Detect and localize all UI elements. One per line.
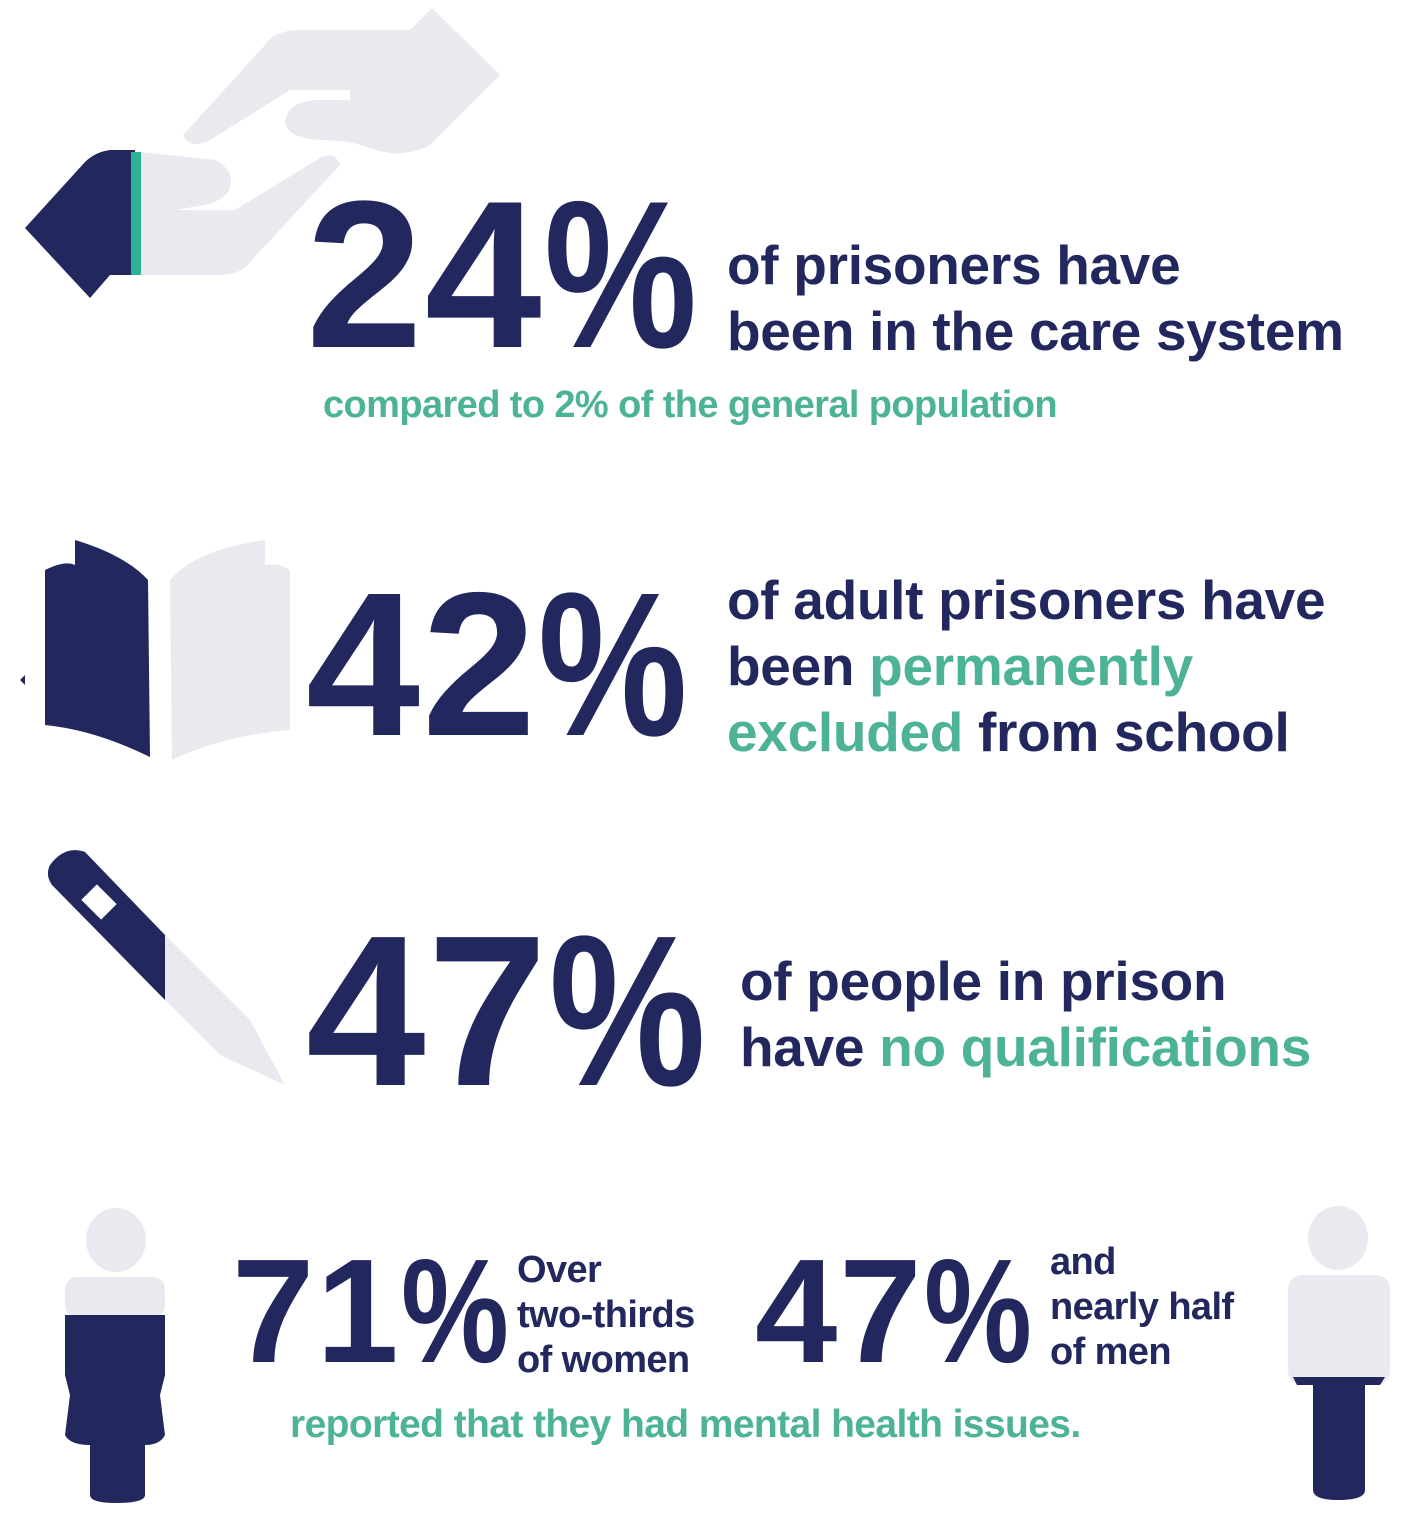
stat: 24% bbox=[306, 157, 698, 392]
stat: 71%: 71 bbox=[232, 1229, 401, 1394]
stat: 71%: % bbox=[401, 1229, 510, 1394]
text: men bbox=[1050, 1241, 1234, 1373]
stat: 47% men bbox=[755, 1229, 1033, 1394]
text: men: nearly half bbox=[1050, 1286, 1233, 1328]
text: compared: compared to 2% of the general population bbox=[323, 384, 1057, 426]
stat: 42%: 42 bbox=[306, 550, 538, 779]
text: women bbox=[517, 1249, 695, 1381]
text: qualifications bbox=[740, 950, 1311, 1078]
text: care system: of prisoners have bbox=[727, 234, 1180, 296]
icon: pencil bbox=[48, 850, 285, 1085]
icon: woman bbox=[65, 1208, 165, 1503]
text: mental health: reported that they had mental health issues. bbox=[290, 1403, 1081, 1446]
text: qualifications: have no qualifications bbox=[740, 1016, 1311, 1078]
text: care system bbox=[727, 234, 1344, 362]
icon: hands bbox=[25, 8, 500, 298]
stat: 71% bbox=[232, 1229, 510, 1394]
text: qualifications: of people in prison bbox=[740, 950, 1226, 1012]
text: women: of women bbox=[517, 1339, 690, 1381]
icon: man bbox=[1288, 1206, 1390, 1500]
stat: 47% bbox=[306, 890, 708, 1131]
text: excluded: been permanently bbox=[727, 635, 1193, 697]
text: excluded: excluded from school bbox=[727, 701, 1289, 763]
icon: book bbox=[20, 540, 290, 760]
text: excluded bbox=[727, 569, 1325, 763]
stat: 47%: % bbox=[549, 890, 708, 1131]
text: women: two-thirds bbox=[517, 1294, 695, 1336]
text: excluded: of adult prisoners have bbox=[727, 569, 1325, 631]
stat: 42% bbox=[306, 550, 689, 779]
text: men: of men bbox=[1050, 1331, 1171, 1373]
text: care system: been in the care system bbox=[727, 300, 1344, 362]
text: men: and bbox=[1050, 1241, 1116, 1283]
stat: 47%: 47 bbox=[306, 890, 549, 1131]
stat: 24%: 24 bbox=[306, 157, 544, 392]
stat: 47% men: % bbox=[924, 1229, 1033, 1394]
stat: 24%: % bbox=[544, 157, 698, 392]
stat: 47% men: 47 bbox=[755, 1229, 924, 1394]
text: women: Over bbox=[517, 1249, 601, 1291]
stat: 42%: % bbox=[538, 550, 689, 779]
